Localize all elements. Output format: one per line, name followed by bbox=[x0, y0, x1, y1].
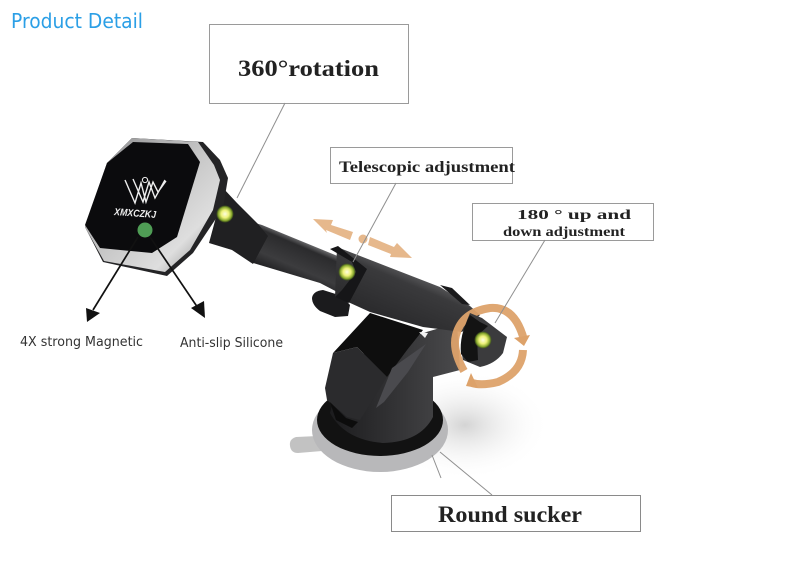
logo: XMXCZKJ: XMXCZKJ bbox=[113, 207, 157, 221]
head pivot joint bbox=[209, 188, 268, 264]
hot spot: magnet bbox=[138, 222, 152, 238]
callout: telescopic adjustment bbox=[330, 148, 516, 184]
logo: XMXCZKJ bbox=[113, 177, 166, 221]
arrow: to anti-slip silicone bbox=[150, 237, 205, 318]
outer arm sleeve bbox=[330, 246, 480, 332]
callout: round sucker bbox=[392, 496, 640, 532]
drop shadow under base bbox=[380, 370, 550, 480]
suction cup base bbox=[290, 384, 448, 472]
magnetic head black face bbox=[85, 142, 200, 253]
callout: 180 degree up and down adjustment: 180 ° up and bbox=[517, 208, 631, 223]
callout: 360 rotation: 360°rotation bbox=[238, 56, 379, 81]
callout: 180 degree up and down adjustment: down adjustment bbox=[503, 225, 625, 240]
callout: 180 degree up and down adjustment bbox=[472, 204, 654, 240]
product: phone mount bbox=[85, 138, 550, 480]
adjustment knob bbox=[312, 290, 350, 317]
leader lines bbox=[237, 103, 545, 495]
pivot cylinder bbox=[461, 313, 507, 367]
orange double arrow: telescopic motion bbox=[313, 219, 412, 258]
label: anti-slip silicone: Anti-slip Silicone bbox=[180, 336, 283, 351]
callout: 360 rotation bbox=[210, 24, 408, 104]
inner telescopic arm bbox=[250, 222, 345, 296]
label: 4X strong magnetic: 4X strong Magnetic bbox=[20, 335, 143, 350]
hot spots: glowing markers bbox=[216, 206, 492, 348]
callout: round sucker: Round sucker bbox=[438, 502, 582, 527]
callout: telescopic adjustment: Telescopic adjustment bbox=[339, 159, 516, 176]
magnetic head outer shell bbox=[85, 138, 228, 276]
heading: Product Detail: Product Detail bbox=[11, 9, 143, 33]
magnetic head silver rim bbox=[85, 138, 220, 272]
arrow: to 4X strong magnetic bbox=[86, 237, 138, 322]
orange rotation arrows bbox=[455, 308, 530, 388]
stand body bbox=[325, 313, 460, 443]
